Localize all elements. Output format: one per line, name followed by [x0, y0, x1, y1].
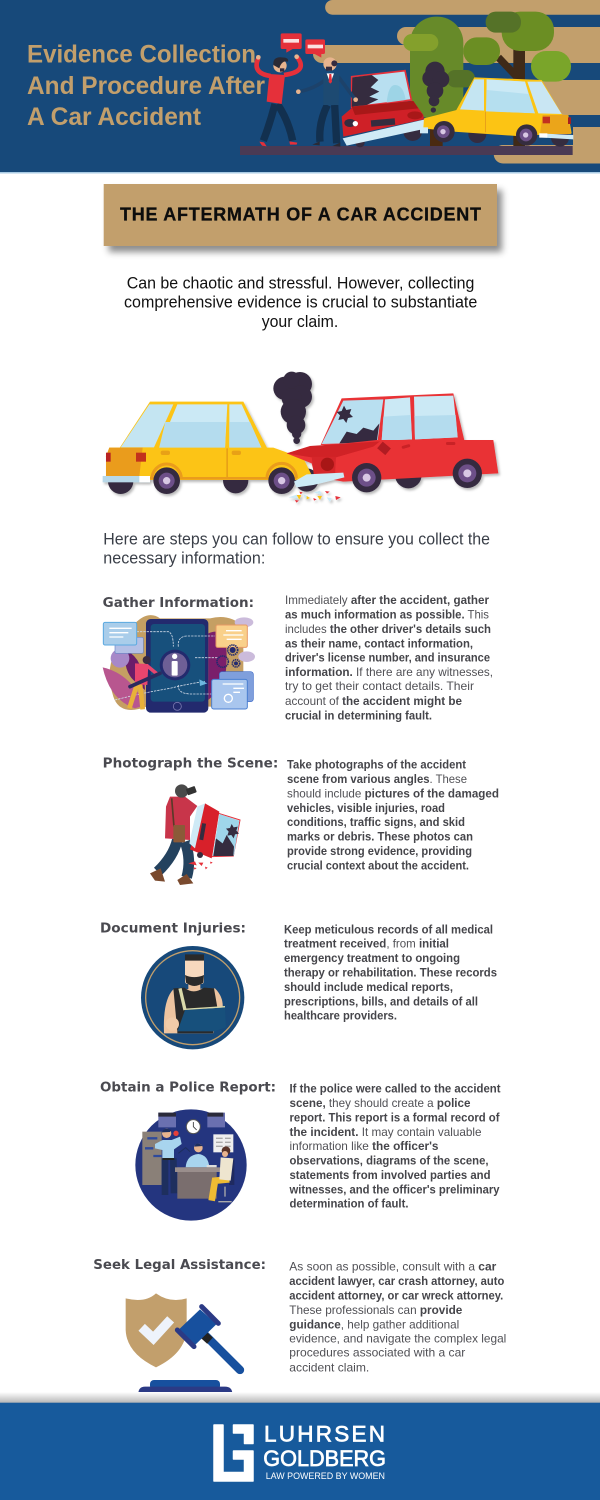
body text: should include medical reports, [284, 980, 453, 994]
heading: Obtain a Police Report: [100, 1081, 276, 1096]
logo wordmark [263, 1422, 386, 1481]
body text: procedures associated with a car [289, 1346, 465, 1360]
illustration: tablet with info icon [103, 615, 255, 713]
heading: Document Injuries: [100, 922, 246, 937]
panel: seek legal assistance [93, 1258, 506, 1394]
steps intro text [103, 530, 490, 567]
body text: the incident. It may contain valuable [290, 1125, 482, 1139]
body text: Keep meticulous records of all medical [284, 922, 493, 936]
body text: scene, they should create a police [290, 1096, 471, 1110]
intro paragraph: your claim. [262, 313, 338, 331]
illustration: photographer and crashed car [150, 784, 240, 885]
body text: prescriptions, bills, and details of all [284, 994, 478, 1008]
panel: section heading banner: THE AFTERMATH OF A CAR ACCIDENT [120, 205, 481, 225]
panel: document injuries [100, 922, 497, 1049]
body text: guidance, help gather additional [289, 1317, 459, 1331]
background tan stripes [313, 0, 600, 164]
red car [287, 393, 498, 492]
body text: try to get their contact details. Their [285, 679, 474, 693]
tree right [463, 12, 571, 146]
heading: Seek Legal Assistance: [93, 1258, 266, 1273]
icon: shield and gavel [126, 1293, 240, 1394]
body text: statements from involved parties and [290, 1168, 490, 1182]
title: A Car Accident [27, 103, 202, 131]
body text: emergency treatment to ongoing [284, 951, 460, 965]
panel: photograph the scene [103, 757, 499, 885]
body text: accident lawyer, car crash attorney, auto [289, 1274, 504, 1288]
body text: accident claim. [289, 1361, 369, 1375]
smoke [273, 372, 312, 444]
body text: information. If there are any witnesses, [285, 665, 493, 679]
body text: driver's license number, and insurance [285, 651, 490, 665]
intro paragraph: Can be chaotic and stressful. However, collecting [127, 274, 474, 292]
body text [284, 922, 497, 1023]
body text: healthcare providers. [284, 1009, 397, 1023]
body text [287, 757, 499, 872]
title: And Procedure After [27, 72, 265, 100]
heading: Photograph the Scene: [103, 757, 278, 772]
panel: obtain a police report [100, 1081, 500, 1221]
body text: as their name, contact information, [285, 636, 473, 650]
body text [289, 1081, 500, 1210]
body text: report. This report is a formal record of [290, 1111, 500, 1125]
body text [289, 1260, 506, 1375]
logo wordmark: LUHRSEN [264, 1422, 385, 1447]
illustration: man with arm sling [141, 946, 244, 1049]
illustration: car collision [103, 372, 498, 503]
panel: header banner [0, 0, 600, 174]
heading: Gather Information: [103, 596, 254, 611]
body text: These professionals can provide [289, 1303, 463, 1317]
logo mark [214, 1425, 253, 1481]
smoke [422, 62, 449, 113]
body text: vehicles, visible injuries, road [287, 801, 445, 815]
body text: Immediately after the accident, gather [285, 593, 489, 607]
intro paragraph: comprehensive evidence is crucial to substantiate [124, 294, 477, 312]
yellow car [420, 77, 573, 147]
body text: Take photographs of the accident [287, 757, 466, 771]
speech bubble right [305, 39, 325, 58]
body text: If the police were called to the accident [290, 1081, 500, 1095]
body text: provide strong evidence, providing [287, 844, 472, 858]
panel: gather information [103, 593, 493, 722]
speech bubble left [281, 33, 302, 53]
body text: crucial context about the accident. [287, 858, 469, 872]
body text: As soon as possible, consult with a car [289, 1260, 497, 1274]
illustration: arguing drivers and crashed cars [240, 12, 573, 155]
body text: evidence, and navigate the complex legal [289, 1332, 506, 1346]
body text: includes the other driver's details such [285, 622, 491, 636]
body text: information like the officer's [290, 1139, 439, 1153]
logo wordmark: LAW POWERED BY WOMEN [266, 1471, 385, 1481]
steps intro text: Here are steps you can follow to ensure you collect the [103, 530, 490, 548]
body text: witnesses, and the officer's preliminary [289, 1182, 500, 1196]
panel: section heading banner [104, 184, 497, 246]
body text: determination of fault. [290, 1196, 408, 1210]
body text: accident attorney, or car wreck attorney. [289, 1288, 503, 1302]
body text: therapy or rehabilitation. These records [284, 966, 497, 980]
person with pencil [129, 656, 160, 709]
seated woman [212, 1146, 233, 1202]
body text: should include pictures of the damaged [287, 786, 499, 800]
body text: conditions, traffic signs, and skid [287, 815, 465, 829]
illustration: police station scene [135, 1109, 247, 1221]
body text: marks or debris. These photos can [287, 829, 473, 843]
steps intro text: necessary information: [103, 549, 265, 567]
body text [285, 593, 493, 722]
intro paragraph [124, 274, 477, 331]
body text: account of the accident might be [285, 694, 462, 708]
body text: as much information as possible. This [285, 608, 489, 622]
body text: treatment received, from initial [284, 937, 449, 951]
man in suit [296, 57, 358, 147]
man in red shirt [256, 54, 301, 146]
seated officer and desk [175, 1143, 221, 1199]
tree left [403, 17, 475, 146]
title: Evidence Collection [27, 40, 256, 68]
body text: observations, diagrams of the scene, [290, 1153, 488, 1167]
panel: footer with logo [0, 1392, 600, 1500]
title [27, 40, 265, 131]
logo wordmark: GOLDBERG [263, 1446, 386, 1471]
yellow car [103, 402, 318, 494]
road [240, 146, 573, 155]
debris [288, 491, 341, 503]
standing officer [155, 1129, 182, 1195]
body text: crucial in determining fault. [285, 708, 432, 722]
body text: scene from various angles. These [287, 772, 467, 786]
red car [342, 71, 427, 147]
